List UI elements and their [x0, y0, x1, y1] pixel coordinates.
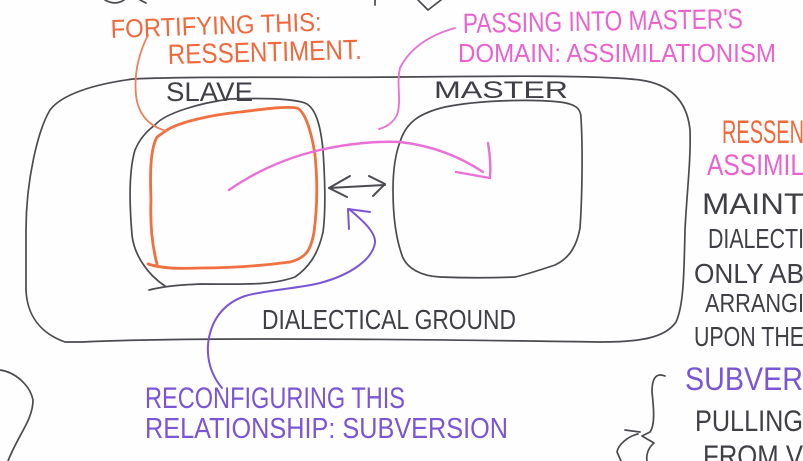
note lines: MAINT: [702, 188, 803, 221]
label: passing into master's domain: [458, 3, 776, 68]
label: reconfiguring this relationship: RECONFIGURING THIS: [145, 382, 405, 415]
label: fortifying this: FORTIFYING THIS:: [110, 7, 322, 44]
purple subversion arrow: [208, 209, 375, 388]
label: reconfiguring this relationship: [145, 382, 508, 445]
orange fortified inner box: [148, 107, 317, 268]
label: passing into master's domain: PASSING INTO MASTER'S: [463, 3, 743, 39]
outer box: dialectical ground: [26, 76, 690, 342]
double-headed arrow: [329, 176, 385, 197]
label: fortifying this: [110, 7, 362, 70]
label: passing into master's domain: DOMAIN: ASSIMILATIONISM: [458, 38, 776, 68]
partial curve at lower left: [0, 370, 33, 461]
label: dialectical ground: DIALECTICAL GROUND: [262, 304, 516, 335]
slave box: [130, 98, 325, 290]
pink leader line: [379, 28, 455, 129]
label: reconfiguring this relationship: RELATIONSHIP: SUBVERSION: [145, 413, 508, 445]
label: slave: SLAVE: [166, 77, 253, 107]
subversion note lines: [695, 405, 803, 461]
label: fortifying this: RESSENTIMENT.: [167, 34, 362, 70]
pink arrow into master domain: [229, 142, 490, 190]
orange leader line: [136, 35, 167, 131]
right column notes: [685, 114, 803, 461]
note lines: [694, 188, 803, 352]
cropped marks along top edge: [105, 0, 441, 10]
label: master: MASTER: [434, 77, 568, 104]
brace and curved arrow: [617, 375, 665, 461]
master box: [393, 100, 582, 278]
